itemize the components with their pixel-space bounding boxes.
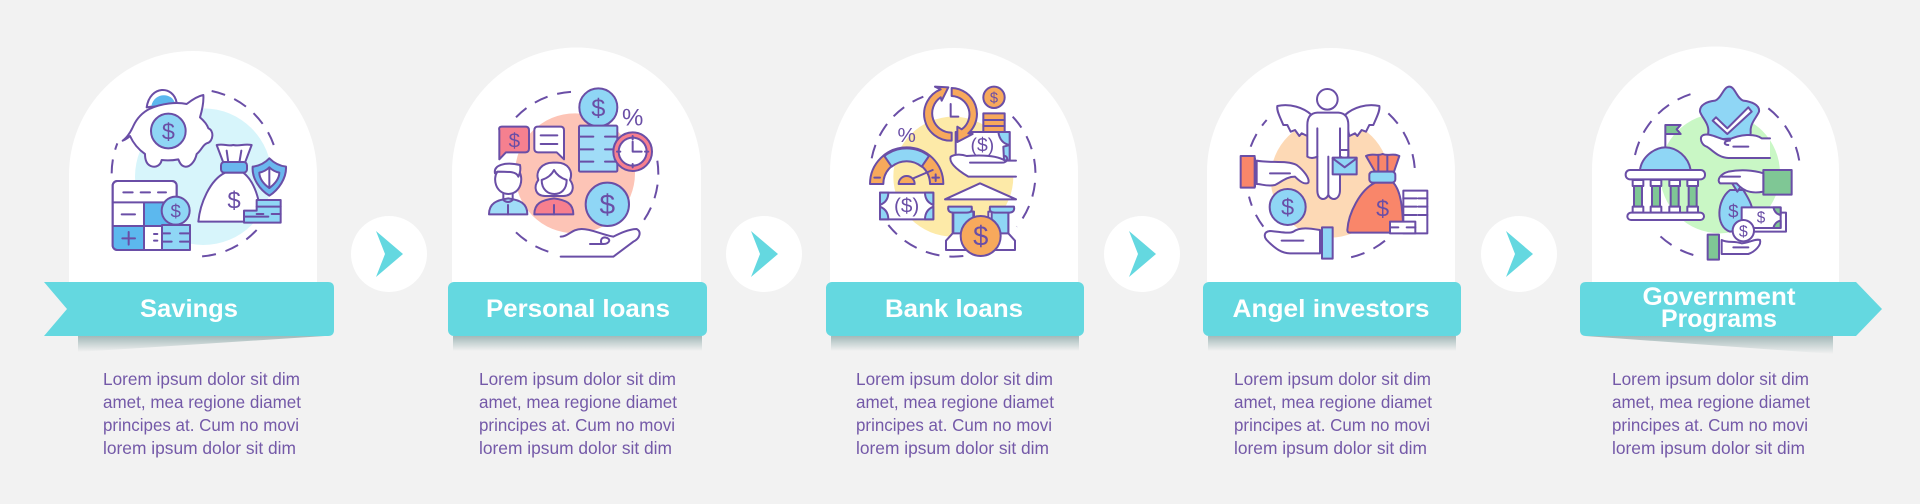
ribbon: angel investors: [1203, 282, 1461, 351]
text block: angel investors: lorem ipsum dolor sit dim: [1234, 438, 1427, 458]
ribbon: personal loans: [448, 282, 707, 351]
icon: government building, approval and funding: [1626, 87, 1800, 260]
white arch card: [69, 51, 317, 290]
icon: people, coins and clock: [489, 88, 658, 257]
ribbon: government programs: [1580, 282, 1882, 354]
text block: personal loans: principes at. Cum no movi: [479, 415, 675, 435]
icon: gauge, cash and bank: $: [973, 221, 988, 252]
icon: gauge, cash and bank: ($): [971, 136, 994, 157]
ribbon: personal loans: Personal loans: [486, 295, 670, 323]
white arch card: [830, 48, 1078, 290]
ribbon: bank loans: Bank loans: [885, 295, 1023, 323]
ribbon: government programs: Programs: [1661, 305, 1777, 333]
icon: government building, approval and funding: $: [1757, 209, 1766, 226]
arrow: bank loans to angel investors: [1104, 216, 1180, 292]
panel: angel investors: [1203, 48, 1461, 458]
ribbon: savings: Savings: [140, 295, 238, 323]
ribbon: government programs: Government: [1642, 283, 1796, 311]
text block: bank loans: amet, mea regione diamet: [856, 392, 1054, 412]
panel: personal loans: [448, 48, 707, 458]
text block: bank loans: Lorem ipsum dolor sit dim: [856, 369, 1053, 389]
text block: personal loans: amet, mea regione diamet: [479, 392, 677, 412]
ribbon: bank loans: [826, 282, 1084, 351]
icon: government building, approval and funding: $: [1728, 201, 1739, 222]
panel: government programs: [1580, 47, 1882, 458]
text block: personal loans: [479, 369, 677, 458]
text block: savings: lorem ipsum dolor sit dim: [103, 438, 296, 458]
icon: gauge, cash and bank: ($): [894, 194, 919, 217]
text block: bank loans: lorem ipsum dolor sit dim: [856, 438, 1049, 458]
text block: personal loans: lorem ipsum dolor sit dim: [479, 438, 672, 458]
ribbon: savings: [44, 282, 334, 352]
icon: gauge, cash and bank: [870, 87, 1035, 257]
white arch card: [1207, 48, 1455, 290]
icon: people, coins and clock: $: [591, 94, 605, 122]
arrow: angel investors to government programs: [1481, 216, 1557, 292]
icon: gauge, cash and bank: $: [990, 91, 998, 107]
text block: angel investors: amet, mea regione diamet: [1234, 392, 1432, 412]
icon: gauge, cash and bank: %: [897, 124, 916, 147]
text block: savings: principes at. Cum no movi: [103, 415, 299, 435]
icon: people, coins and clock: %: [622, 104, 643, 131]
text block: angel investors: [1234, 369, 1432, 458]
text block: angel investors: principes at. Cum no movi: [1234, 415, 1430, 435]
text block: savings: Lorem ipsum dolor sit dim: [103, 369, 300, 389]
icon: piggy bank, money bag and calculator: $: [162, 118, 175, 144]
text block: government programs: principes at. Cum no movi: [1612, 415, 1808, 435]
text block: government programs: amet, mea regione diamet: [1612, 392, 1810, 412]
text block: bank loans: [856, 369, 1054, 458]
panel: savings: [44, 51, 334, 458]
text block: personal loans: Lorem ipsum dolor sit dim: [479, 369, 676, 389]
ribbon: angel investors: Angel investors: [1232, 295, 1430, 323]
icon: piggy bank, money bag and calculator: $: [227, 187, 241, 214]
icon: angel investor with hands and money bag: [1241, 89, 1427, 259]
text block: savings: amet, mea regione diamet: [103, 392, 301, 412]
icon: people, coins and clock: $: [600, 189, 616, 220]
text block: angel investors: Lorem ipsum dolor sit dim: [1234, 369, 1431, 389]
panel: bank loans: [826, 48, 1084, 458]
icon: government building, approval and funding: $: [1739, 224, 1748, 241]
white arch card: [1592, 47, 1839, 290]
icon: piggy bank, money bag and calculator: [112, 90, 286, 257]
arrow: personal loans to bank loans: [726, 216, 802, 292]
icon: people, coins and clock: $: [509, 129, 521, 152]
text block: government programs: [1612, 369, 1810, 458]
text block: government programs: lorem ipsum dolor sit dim: [1612, 438, 1805, 458]
arrow: savings to personal loans: [351, 216, 427, 292]
white arch card: [452, 48, 701, 290]
text block: government programs: Lorem ipsum dolor sit dim: [1612, 369, 1809, 389]
icon: piggy bank, money bag and calculator: $: [170, 200, 181, 221]
text block: savings: [103, 369, 301, 458]
icon: angel investor with hands and money bag: $: [1376, 196, 1389, 222]
icon: angel investor with hands and money bag: $: [1281, 194, 1294, 220]
text block: bank loans: principes at. Cum no movi: [856, 415, 1052, 435]
